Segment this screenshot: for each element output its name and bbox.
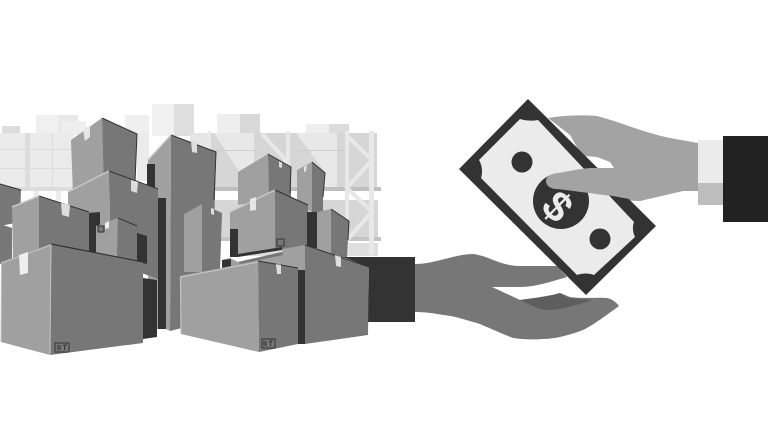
box: tall centre bbox=[147, 135, 216, 331]
sleeve: lower bbox=[343, 257, 415, 322]
icon: fragile label bbox=[55, 343, 69, 352]
box: upper right bbox=[238, 154, 291, 205]
box: second row centre bbox=[68, 171, 166, 329]
banknote bbox=[459, 99, 656, 295]
lower hand and sleeve bbox=[343, 254, 619, 339]
upper hand finger over note bbox=[546, 168, 640, 201]
dollar sign: $ bbox=[533, 181, 583, 231]
note spots bbox=[512, 152, 532, 172]
box: right small bbox=[307, 209, 349, 258]
box: small front bbox=[96, 218, 147, 264]
note centre medallion bbox=[533, 173, 589, 229]
hand: lower open palm bbox=[415, 254, 619, 339]
box: middle right bbox=[230, 190, 308, 257]
box: upper right narrow bbox=[297, 162, 325, 214]
boxes stack bbox=[0, 118, 369, 355]
box: left edge stack bbox=[0, 184, 21, 264]
upper hand back bbox=[548, 115, 698, 201]
box: big front right bbox=[180, 245, 369, 352]
note face bbox=[479, 119, 635, 275]
sleeve: upper bbox=[723, 136, 768, 222]
icon: fragile label bbox=[262, 339, 275, 348]
cuff bbox=[698, 140, 723, 183]
box: big front left bbox=[1, 244, 157, 355]
box: top back bbox=[71, 118, 137, 195]
upper sleeve and cuff bbox=[698, 136, 768, 222]
hand: palm shadow bbox=[520, 293, 593, 310]
warehouse shelving background bbox=[0, 104, 381, 256]
box: second row left bbox=[12, 196, 100, 262]
box: centre narrow bbox=[184, 204, 222, 272]
note border bbox=[459, 99, 656, 295]
gap between upper hand and finger bbox=[585, 156, 614, 169]
